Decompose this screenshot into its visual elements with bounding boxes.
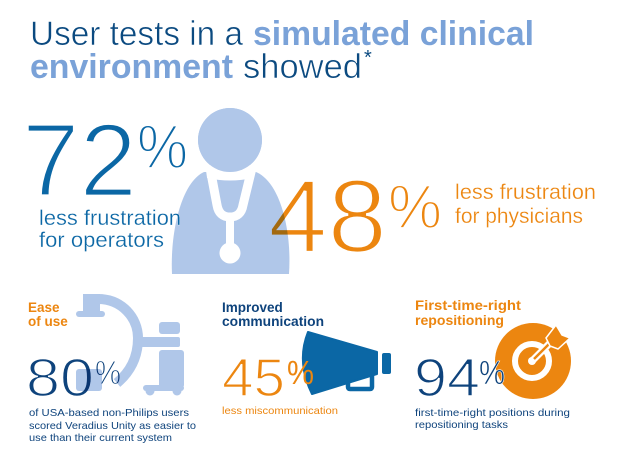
stat: 48% for physicians: % xyxy=(388,173,442,242)
title: environment xyxy=(30,48,233,86)
description: 80% xyxy=(29,408,196,444)
title xyxy=(30,15,534,86)
value: 94% xyxy=(414,348,505,408)
label: first-time-right repositioning: repositioning xyxy=(415,313,504,328)
value: 45% xyxy=(222,348,314,408)
title: User tests in a xyxy=(30,15,243,53)
stat: 72% for operators xyxy=(22,103,188,252)
title: simulated clinical xyxy=(253,15,534,53)
label: first-time-right repositioning xyxy=(415,298,522,328)
stat: 48% for physicians: less frustration xyxy=(455,181,596,204)
value: 80% xyxy=(26,348,121,408)
block: improved communication xyxy=(222,300,338,417)
stat: 72% for operators: 72 xyxy=(22,103,137,219)
stat: 72% for operators: % xyxy=(137,113,188,182)
value: 94%: 94 xyxy=(414,348,480,408)
value: 45%: 45 xyxy=(222,348,285,408)
label: improved communication: Improved xyxy=(222,300,283,315)
value: 80%: % xyxy=(95,354,121,391)
stat: 48% for physicians xyxy=(268,159,596,275)
stat: 72% for operators: less frustration xyxy=(39,207,181,230)
block: ease of use xyxy=(26,300,196,444)
title: * xyxy=(364,47,372,69)
label: improved communication xyxy=(222,300,324,329)
stat: 72% for operators: for operators xyxy=(39,229,164,252)
value: 45%: % xyxy=(287,354,314,391)
value: 80%: 80 xyxy=(26,348,94,408)
description: 94% xyxy=(415,408,570,431)
label: ease of use: Ease xyxy=(28,300,60,315)
description: 80%: of USA-based non-Philips users xyxy=(29,408,189,419)
stat: 48% for physicians: 48 xyxy=(268,159,387,275)
title: showed xyxy=(243,48,362,86)
label: improved communication: communication xyxy=(222,314,324,329)
description: 80%: use than their current system xyxy=(29,433,172,444)
stat: 48% for physicians: for physicians xyxy=(455,205,583,228)
label: first-time-right repositioning: First-time-right xyxy=(415,298,522,313)
description: 80%: scored Veradius Unity as easier to xyxy=(29,421,196,432)
label: ease of use: of use xyxy=(28,314,68,329)
value: 94%: % xyxy=(479,354,505,391)
description: 94%: repositioning tasks xyxy=(415,420,508,431)
icon: megaphone xyxy=(303,332,391,394)
icon: doctor with stethoscope xyxy=(172,108,289,274)
block: first-time-right repositioning xyxy=(414,298,570,431)
icon: C-arm imaging system xyxy=(76,294,184,396)
description: 94%: first-time-right positions during xyxy=(415,408,570,419)
icon: target with arrow xyxy=(495,323,571,399)
description: 45%: less miscommunication xyxy=(222,406,338,417)
label: ease of use xyxy=(28,300,68,329)
